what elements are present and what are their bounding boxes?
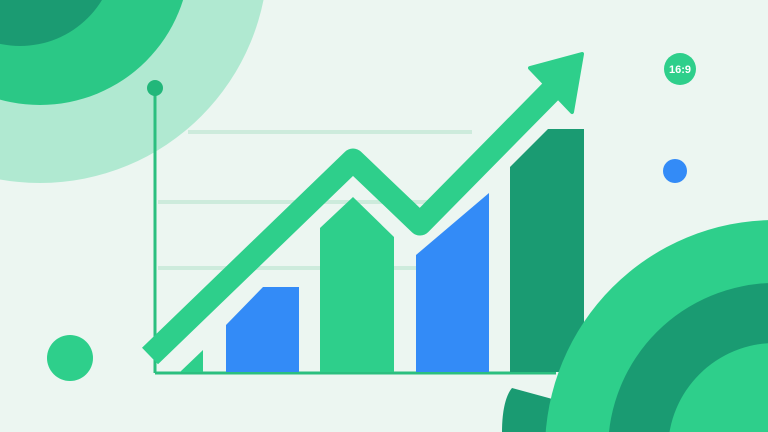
chart axes — [147, 80, 556, 373]
bar: small — [180, 350, 203, 372]
decoration: bottom-right concentric circles — [502, 220, 768, 432]
badge: 16:9: 16:9 — [669, 64, 691, 76]
arrow: trend line — [150, 54, 582, 356]
decoration: top-left concentric circles — [0, 0, 268, 183]
decoration: green dot — [47, 335, 93, 381]
bar: green 2 — [320, 197, 394, 372]
bar: dark green 4 — [510, 129, 584, 372]
gridlines — [158, 132, 472, 268]
badge: 16:9 — [664, 53, 696, 85]
bar chart — [180, 129, 584, 372]
bar: blue 3 — [416, 193, 489, 372]
decoration: blue dot — [663, 159, 687, 183]
bar: blue 1 — [226, 287, 299, 372]
